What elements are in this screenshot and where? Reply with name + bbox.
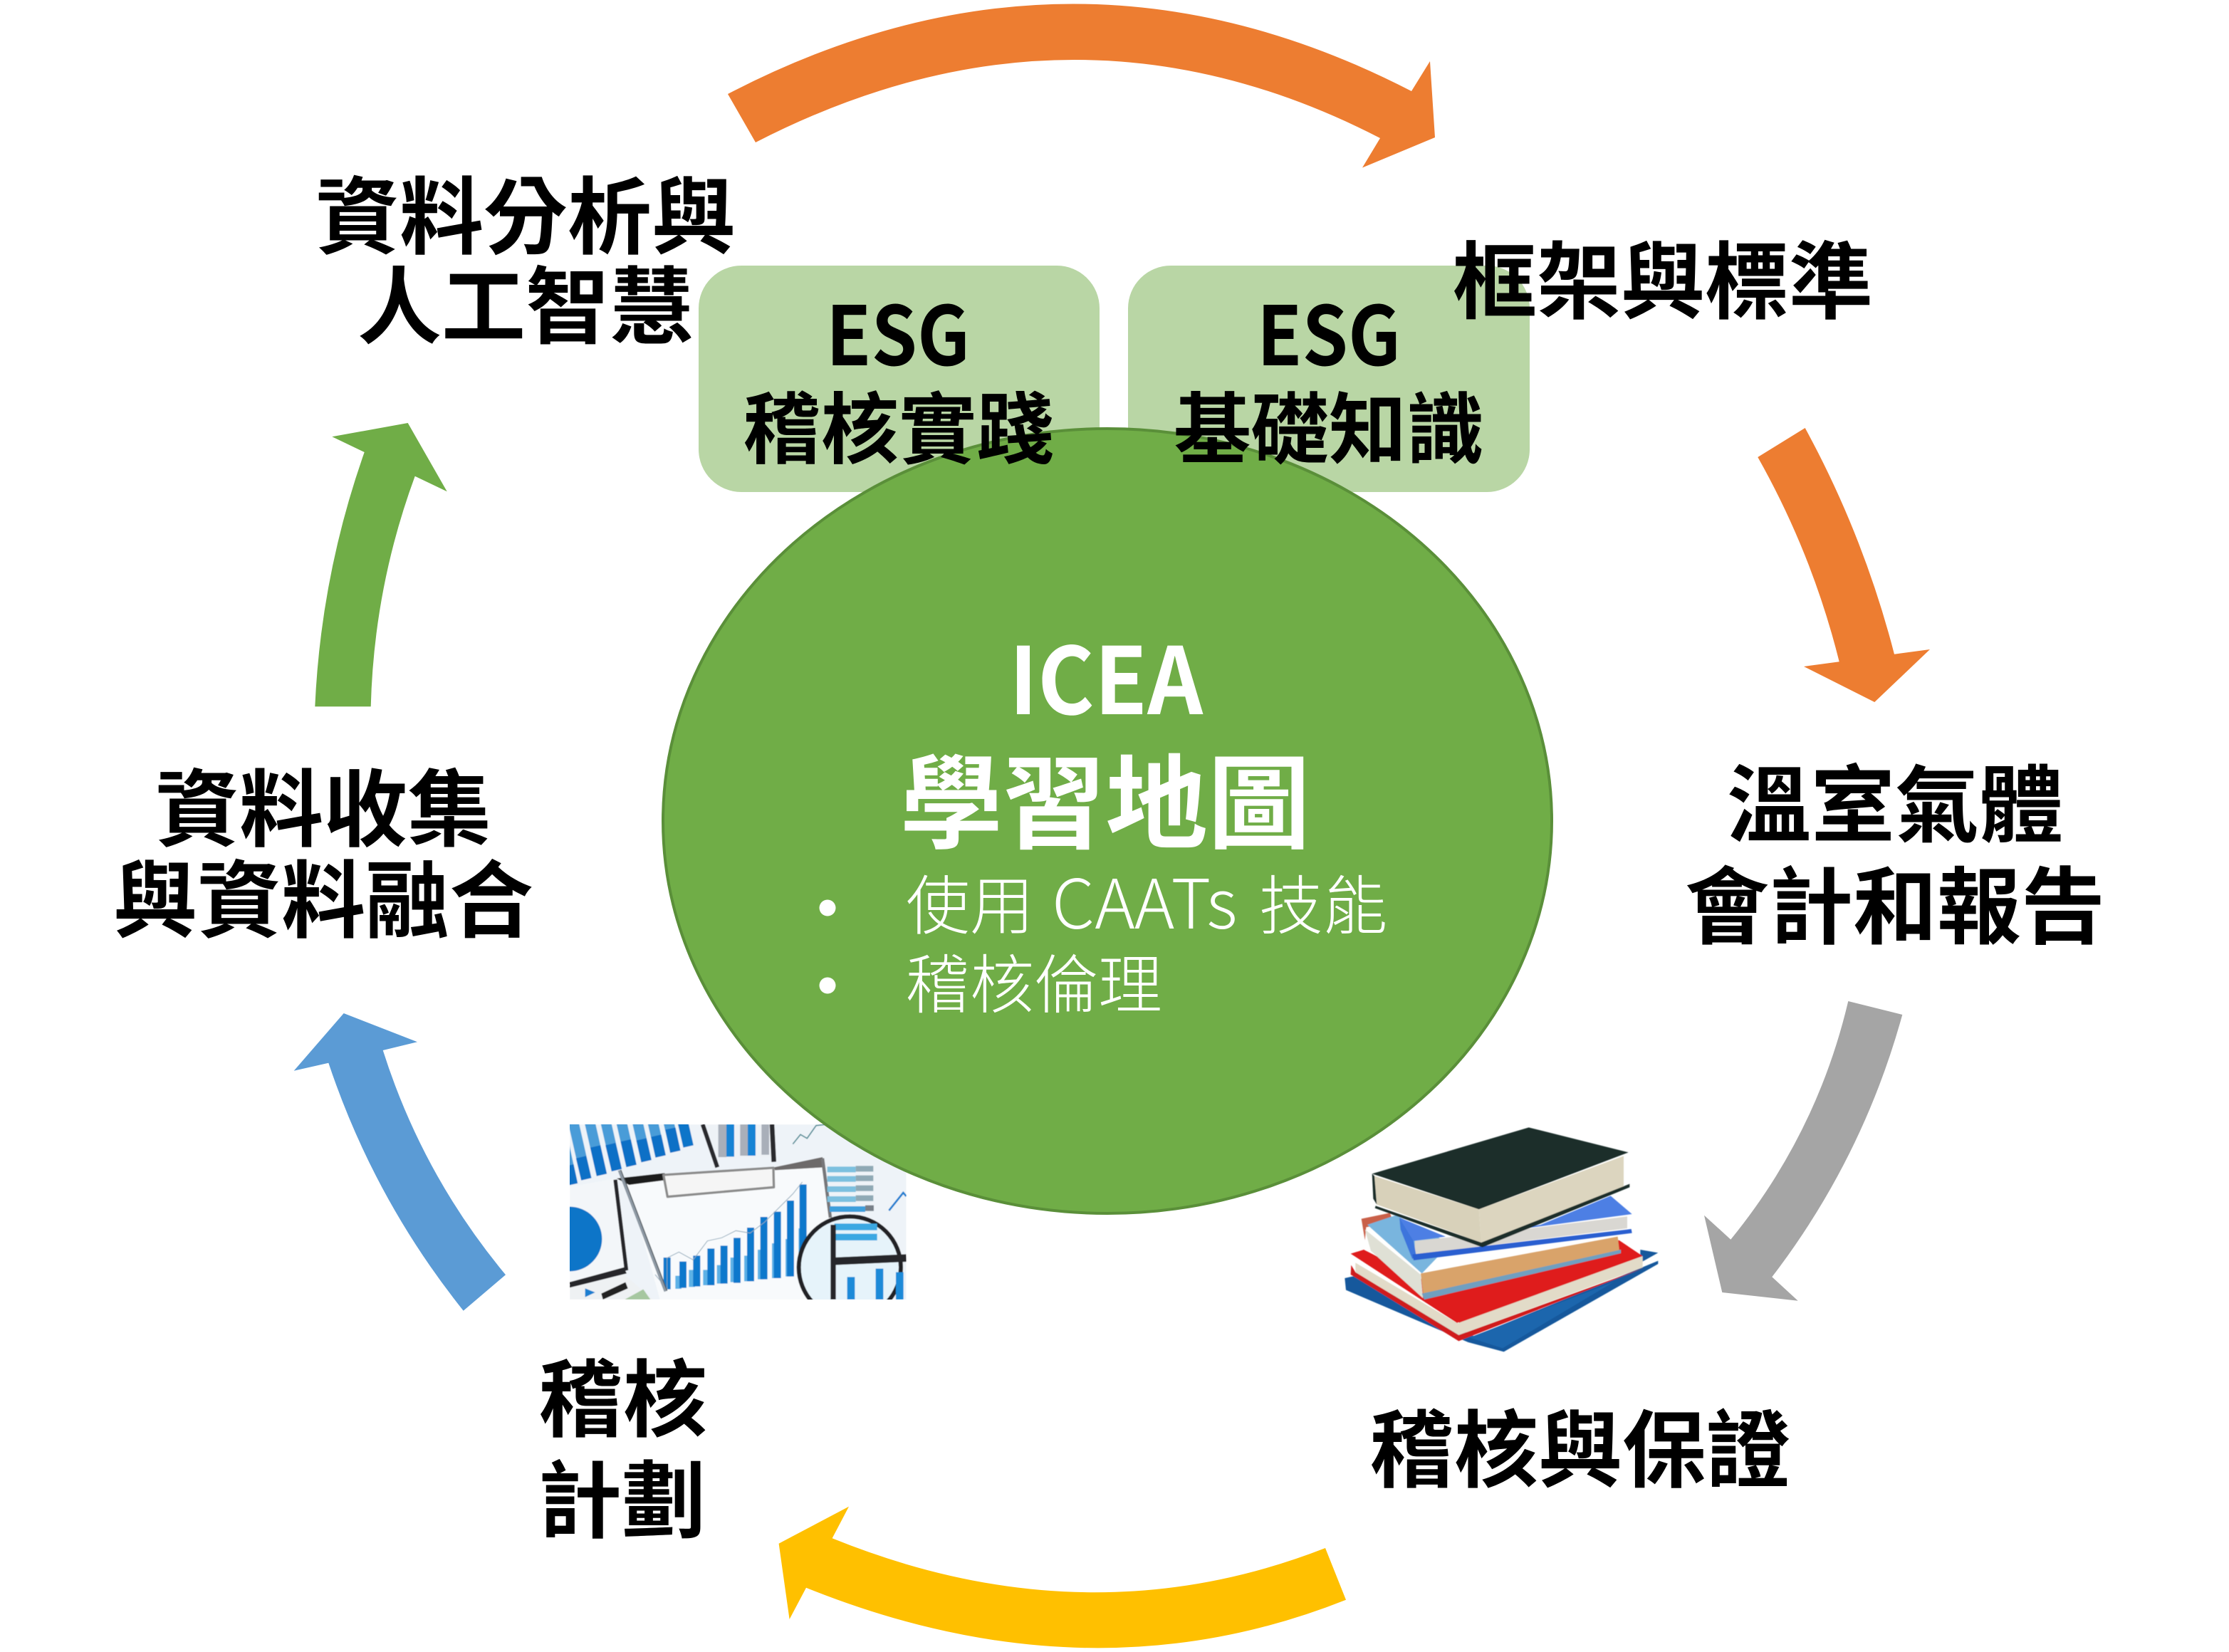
image: charts on clipboard with magnifier [570,1124,907,1300]
center bullet list: CAATs [1052,849,1238,948]
label: audit planning [538,1332,707,1555]
arrow: blue [294,1013,506,1311]
center title: 學習地圖 [900,722,1310,870]
label: GHG accounting and reporting [1685,738,2105,961]
arrow: green [315,423,447,706]
label: data analytics and AI: 資料分析與 [315,150,736,271]
label: audit planning: 計劃 [538,1433,706,1555]
label: GHG accounting and reporting: 溫室氣體 [1727,738,2063,859]
arrow: right orange [1758,428,1930,702]
arrow: gray [1704,1001,1902,1301]
label: audit and assurance: 稽核與保證 [1370,1383,1790,1505]
label: GHG accounting and reporting: 會計和報告 [1685,840,2105,961]
label: data collection and fusion: 資料收集 [155,742,491,864]
panel: ESG audit practice box [699,266,1100,492]
label: data collection and fusion [113,742,533,955]
center bullet list: 稽核倫理 [906,934,1162,1026]
image: stack of books [1345,1127,1658,1352]
box heading: ESG fundamentals: ESG [1257,271,1401,390]
arrow: top orange [728,4,1435,167]
center bullet list [819,849,1387,1026]
label: audit planning: 稽核 [539,1332,707,1454]
label: data collection and fusion: 與資料融合 [113,833,533,955]
center title: ICEA [1009,607,1204,741]
arrow: yellow [779,1507,1346,1648]
label: data analytics and AI: 人工智慧 [357,239,694,361]
center bullet list: 使用 [906,854,1034,947]
center bullet list: 技能 [1259,854,1387,947]
box heading: ESG audit practice [743,271,1054,480]
panel: ESG fundamentals box [1128,266,1530,492]
label: frameworks and standards: 框架與標準 [1453,214,1873,336]
box heading: ESG fundamentals: 基礎知識 [1174,368,1484,480]
box heading: ESG audit practice: 稽核實踐 [743,368,1054,480]
label: data analytics and AI [315,150,736,361]
box heading: ESG fundamentals [1174,271,1484,480]
center title [900,607,1310,870]
center circle [663,429,1552,1213]
box heading: ESG audit practice: ESG [826,271,970,390]
